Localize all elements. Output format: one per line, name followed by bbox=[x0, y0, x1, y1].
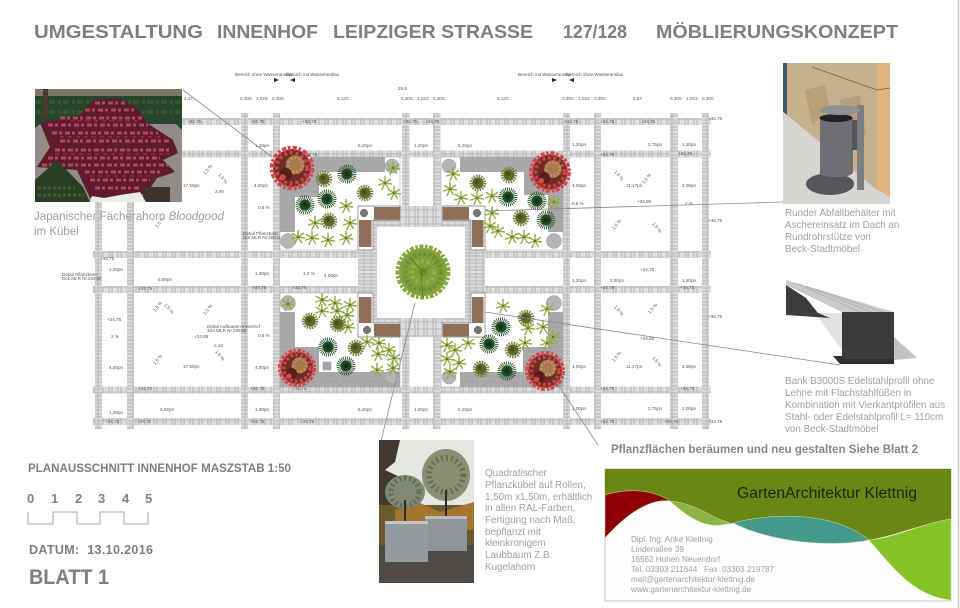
plan annotations: levels and dimensions: 1,5 % bbox=[651, 355, 663, 368]
callout: planting beds note: Pflanzflächen beräumen und neu gestalten Siehe Blatt 2 bbox=[611, 444, 918, 456]
bin post and lid bbox=[857, 105, 864, 190]
plan annotations: levels and dimensions: +34,75 bbox=[252, 285, 267, 290]
plan annotations: levels and dimensions: +34,75 bbox=[708, 218, 723, 223]
plan annotations: levels and dimensions: 4,00pn bbox=[255, 365, 269, 370]
caption: bench: Kombination mit Vierkantprofilen aus bbox=[785, 400, 945, 411]
caption: litter bin: Aschereinsatz im Dach an bbox=[785, 220, 899, 231]
photo: square planters bbox=[379, 440, 474, 583]
scale bar bbox=[27, 491, 152, 524]
plan annotations: levels and dimensions: 1,5 % bbox=[641, 172, 652, 185]
plan annotations: levels and dimensions: +34,75 bbox=[708, 116, 723, 121]
caption: square planters: Quadratischer bbox=[485, 468, 548, 479]
plan paving grid bbox=[93, 113, 711, 429]
plan annotations: levels and dimensions: +34,75 bbox=[600, 119, 615, 124]
plan annotations: levels and dimensions: +34,75 bbox=[600, 419, 615, 424]
plan annotations: levels and dimensions: +34,75 bbox=[664, 419, 679, 424]
planter boxes bbox=[425, 517, 467, 551]
plan annotations: levels and dimensions: 17,50pn bbox=[183, 364, 200, 369]
plan annotations: levels and dimensions: 17,50pn bbox=[183, 183, 200, 188]
litter bins bbox=[360, 209, 482, 334]
plan annotations: levels and dimensions: 2,40 bbox=[215, 189, 224, 194]
contact details: Dipl. Ing. Anke Klettnig bbox=[631, 535, 713, 544]
plan annotations: levels and dimensions: 2 % bbox=[111, 334, 119, 339]
scale bar: 3 bbox=[98, 491, 105, 506]
plants: bottom right bed bbox=[440, 300, 560, 378]
plan annotations: levels and dimensions: 4,00pn bbox=[572, 183, 586, 188]
plan annotations: levels and dimensions: Detail Pflanzbeet bbox=[243, 231, 278, 236]
site plan bbox=[62, 72, 723, 429]
caption: square planters: Kugelahorn bbox=[485, 562, 535, 573]
plan annotations: levels and dimensions: +34,88 bbox=[194, 334, 209, 339]
plan annotations: levels and dimensions: 10A MLR Nr.2061B bbox=[207, 328, 246, 333]
caption: square planters: Fertigung nach Maß, bbox=[485, 515, 576, 526]
plan annotations: levels and dimensions: 11,17pn bbox=[626, 364, 643, 369]
plan annotations: levels and dimensions: 0,300 bbox=[401, 96, 413, 101]
plan annotations: levels and dimensions: 4,00pn bbox=[109, 365, 123, 370]
plan annotations: levels and dimensions: 1,023 bbox=[578, 96, 590, 101]
contact details bbox=[630, 535, 775, 594]
plan annotations: levels and dimensions: 1,00pn bbox=[414, 407, 428, 412]
plan annotations: levels and dimensions: 1,20pn bbox=[414, 143, 428, 148]
plants: top left bed bbox=[292, 162, 400, 246]
plan annotations: levels and dimensions: 4,00pn bbox=[682, 364, 696, 369]
plan annotations: levels and dimensions: +34,75 bbox=[640, 267, 655, 272]
caption: square planters: bepflanzt mit bbox=[485, 527, 541, 538]
caption: square planters: 1,50m x1,50m, erhältlich bbox=[485, 492, 592, 503]
plan annotations: levels and dimensions: 3,57 bbox=[633, 96, 642, 101]
plan annotations: levels and dimensions: 4,00pn bbox=[254, 183, 268, 188]
plants: top right bed bbox=[444, 168, 560, 248]
plan annotations: levels and dimensions: 0,8 % bbox=[258, 333, 270, 338]
plants: bottom left bed bbox=[282, 294, 400, 376]
planting beds: white ground with grey gravel strips bbox=[280, 157, 563, 387]
plan annotations: levels and dimensions: 0,300 bbox=[670, 96, 682, 101]
plan annotations: levels and dimensions: 1,5 % bbox=[611, 350, 622, 363]
caption: Japanese maple: im Kübel bbox=[34, 226, 79, 238]
plan annotations: levels and dimensions: 5,50pn bbox=[158, 277, 172, 282]
caption: bench: Stahl- oder Edelstahlprofil L= 110cm bbox=[785, 412, 943, 423]
scale bar: 0 bbox=[27, 491, 34, 506]
plan annotations: levels and dimensions: 1,023 bbox=[686, 96, 698, 101]
plan annotations: levels and dimensions: 1,5 % bbox=[651, 221, 663, 234]
plan annotations: levels and dimensions: +34,75 bbox=[680, 386, 695, 391]
plan annotations: levels and dimensions: +34,75 bbox=[292, 386, 307, 391]
scale heading: PLANAUSSCHNITT INNENHOF MASZSTAB 1:50 bbox=[28, 463, 291, 475]
plan annotations: levels and dimensions: 5,20pn bbox=[358, 143, 372, 148]
bright green wave bbox=[869, 519, 951, 600]
plan annotations: levels and dimensions: 1,20pn bbox=[682, 142, 696, 147]
contact details: mail@gartenarchitektur-klettnig.de bbox=[631, 575, 755, 584]
caption: bench: von Beck-Stadtmöbel bbox=[785, 424, 879, 435]
plan annotations: levels and dimensions: +34,75 bbox=[303, 152, 318, 157]
plan annotations: levels and dimensions: +34,75 bbox=[600, 386, 615, 391]
plan annotations: levels and dimensions: +34,75 bbox=[100, 256, 115, 261]
bin body bbox=[820, 118, 853, 173]
plan annotations: levels and dimensions: +34,75 bbox=[680, 285, 695, 290]
leader lines bbox=[183, 90, 840, 445]
photo: litter bin bbox=[783, 63, 890, 204]
plan annotations: levels and dimensions: +34,75 bbox=[137, 119, 152, 124]
plan annotations: levels and dimensions: 0,300 bbox=[562, 96, 574, 101]
plan annotations: levels and dimensions: 5,20pn bbox=[358, 407, 372, 412]
title bbox=[34, 22, 898, 42]
plan annotations: levels and dimensions: 5,120 bbox=[497, 96, 509, 101]
olive banner bbox=[605, 469, 951, 543]
caption: square planters: Laubbaum Z.B. bbox=[485, 550, 552, 561]
plan annotations: levels and dimensions: 1,5 % bbox=[214, 349, 226, 362]
plan annotations: levels and dimensions: 1,5 % bbox=[154, 216, 165, 229]
plan annotations: levels and dimensions: Bereich ohne Wasseranslau bbox=[235, 72, 293, 77]
title: 127/128 bbox=[563, 22, 627, 42]
plan annotations: levels and dimensions: +34,75 bbox=[105, 119, 120, 124]
plan annotations: levels and dimensions: Bereich mit Wasseranslau bbox=[518, 72, 572, 77]
plan annotations: levels and dimensions: +34,75 bbox=[292, 285, 307, 290]
plan annotations: levels and dimensions: +34,75 bbox=[302, 119, 317, 124]
central plaza bbox=[358, 206, 485, 337]
caption: Japanese maple: Japanischer Fächerahorn Bloodgood bbox=[34, 211, 225, 223]
plan annotations: levels and dimensions: +34,75 bbox=[250, 386, 265, 391]
caption: bench bbox=[785, 376, 945, 435]
plan annotations: levels and dimensions: 5,20pn bbox=[458, 143, 472, 148]
teal wave bbox=[733, 516, 869, 543]
plan annotations: levels and dimensions: 0,8 % bbox=[258, 205, 270, 210]
plan annotations: levels and dimensions: Dck MLR Nr.2051B bbox=[62, 276, 101, 281]
red wave bbox=[605, 491, 670, 538]
caption: litter bin: Runder Abfallbehälter mit bbox=[785, 208, 896, 219]
plan annotations: levels and dimensions: 0,8 % bbox=[572, 201, 584, 206]
plan annotations: levels and dimensions: 11,17pn bbox=[626, 183, 643, 188]
plan annotations: levels and dimensions: 1,5 % bbox=[202, 303, 213, 316]
plan annotations: levels and dimensions: 4,00pn bbox=[682, 183, 696, 188]
plan annotations: levels and dimensions: 1,3 % bbox=[303, 271, 315, 276]
plan annotations: levels and dimensions: +34,75 bbox=[708, 314, 723, 319]
plan annotations: levels and dimensions: 0,300 bbox=[240, 96, 252, 101]
plan annotations: levels and dimensions: 1,5 % bbox=[613, 304, 625, 317]
plan annotations: levels and dimensions: +34,75 bbox=[403, 119, 418, 124]
plan annotations: levels and dimensions: +34,88 bbox=[637, 199, 652, 204]
plan annotations: levels and dimensions: 0,300 bbox=[433, 96, 445, 101]
planters with grey circles bbox=[280, 159, 562, 384]
plan annotations: levels and dimensions: +34,75 bbox=[641, 119, 656, 124]
title: MÖBLIERUNGSKONZEPT bbox=[656, 22, 898, 42]
plan annotations: levels and dimensions: 1,5 % bbox=[613, 169, 625, 182]
plan annotations: levels and dimensions: 1,5 % bbox=[152, 353, 163, 366]
scale bar: 4 bbox=[122, 491, 130, 506]
plan annotations: levels and dimensions: +34,75 bbox=[564, 119, 579, 124]
caption: bench: Lehne mit Flachstahlfüßen in bbox=[785, 388, 911, 399]
contact details: Tel. 03303 211644 Fax 03303 219787 bbox=[631, 565, 775, 574]
plan annotations: levels and dimensions: Bereich ohne Wasseranslau bbox=[566, 72, 624, 77]
plan annotations: levels and dimensions: 1,5 % bbox=[202, 163, 213, 176]
plan annotations: levels and dimensions: 1,5 % bbox=[647, 302, 658, 315]
plan annotations: levels and dimensions: +34.75 bbox=[187, 119, 202, 124]
scale bar: 1 bbox=[51, 491, 58, 506]
caption: square planters: kleinkronigem bbox=[485, 538, 546, 549]
sheet number: BLATT 1 bbox=[29, 565, 109, 589]
plan annotations: levels and dimensions: 1,00pn bbox=[255, 407, 269, 412]
plan annotations: levels and dimensions: 0,300 bbox=[272, 96, 284, 101]
caption: Japanese maple bbox=[34, 211, 225, 238]
plan annotations: levels and dimensions: Detail Aufbauten Innenhof bbox=[207, 324, 261, 329]
plan annotations: levels and dimensions: 2,75pn bbox=[648, 142, 662, 147]
plan annotations: levels and dimensions: 1,5 % bbox=[152, 300, 163, 313]
title: UMGESTALTUNG bbox=[34, 22, 203, 42]
plan annotations: levels and dimensions: 5,120 bbox=[337, 96, 349, 101]
caption: litter bin: Beck-Stadtmöbel bbox=[785, 244, 860, 255]
plan annotations: levels and dimensions: Detail Pflanzbeet bbox=[62, 272, 97, 277]
plan annotations: levels and dimensions: 1,023 bbox=[256, 96, 268, 101]
plan annotations: levels and dimensions: 5,20pn bbox=[458, 407, 472, 412]
plan annotations: levels and dimensions: 1,00pn bbox=[682, 406, 696, 411]
contact details: Lindenallee 39 bbox=[631, 545, 684, 554]
plan annotations: levels and dimensions: 1,5 % bbox=[217, 172, 229, 185]
company name: GartenArchitektur Klettnig bbox=[737, 485, 917, 502]
plan annotations: levels and dimensions: +34,75 bbox=[250, 419, 265, 424]
plan annotations: levels and dimensions bbox=[62, 72, 723, 424]
plan annotations: levels and dimensions: +34,75 bbox=[250, 119, 265, 124]
plan annotations: levels and dimensions: 4,00pn bbox=[324, 273, 338, 278]
plan annotations: levels and dimensions: +34,75 bbox=[678, 151, 693, 156]
plan annotations: levels and dimensions: 2,75pn bbox=[648, 406, 662, 411]
plan annotations: levels and dimensions: +34,75 bbox=[600, 285, 615, 290]
caption: litter bin: Rundrohrstütze von bbox=[785, 232, 871, 243]
plan annotations: levels and dimensions: 4,00pn bbox=[572, 364, 586, 369]
caption: square planters: in allen RAL-Farben, bbox=[485, 503, 575, 514]
plan annotations: levels and dimensions: +34,75 bbox=[600, 152, 615, 157]
red Japanese maples bbox=[272, 148, 569, 389]
title: INNENHOF bbox=[217, 22, 318, 42]
plan annotations: levels and dimensions: 0,300 bbox=[594, 96, 606, 101]
plan annotations: levels and dimensions: +34,80 bbox=[640, 336, 655, 341]
plan annotations: levels and dimensions: 1,00pn bbox=[109, 410, 123, 415]
plan annotations: levels and dimensions: 0,300 bbox=[702, 96, 714, 101]
plan annotations: levels and dimensions: +34,75 bbox=[425, 119, 440, 124]
plan annotations: levels and dimensions: 3,50pn bbox=[610, 278, 624, 283]
plan annotations: levels and dimensions: 4,02pn bbox=[160, 407, 174, 412]
caption: square planters: Pflanzkübel auf Rollen, bbox=[485, 480, 586, 491]
plan annotations: levels and dimensions: +34,75 bbox=[137, 419, 152, 424]
central tree bbox=[398, 247, 448, 298]
plan annotations: levels and dimensions: 1,20pn bbox=[572, 142, 586, 147]
photo: bench bbox=[786, 280, 917, 364]
benches bbox=[359, 207, 484, 336]
light green wave bbox=[670, 501, 730, 525]
plan annotations: levels and dimensions: Nm MLR Nr.2061B bbox=[243, 235, 282, 240]
plan annotations: levels and dimensions: +34,75 bbox=[105, 419, 120, 424]
title: LEIPZIGER STRASSE bbox=[333, 22, 533, 42]
caption: square planters bbox=[485, 468, 592, 573]
plan annotations: levels and dimensions: +34,75 bbox=[300, 419, 315, 424]
plan annotations: levels and dimensions: 1,20pn bbox=[255, 143, 269, 148]
logo card bbox=[605, 469, 951, 601]
plan annotations: levels and dimensions: 2,44 bbox=[214, 343, 223, 348]
corner boxes bbox=[358, 206, 485, 337]
plan annotations: levels and dimensions: 1,5 % bbox=[611, 218, 622, 231]
plan annotations: levels and dimensions: Bereich mit Wasseranslau bbox=[286, 72, 340, 77]
plan annotations: levels and dimensions: 1,023 bbox=[417, 96, 429, 101]
plan annotations: levels and dimensions: +34,75 bbox=[708, 419, 723, 424]
caption: bench: Bank B3000S Edelstahlprofil ohne bbox=[785, 376, 935, 387]
plan annotations: levels and dimensions: 1,5 % bbox=[163, 302, 175, 315]
contact details: www.gartenarchitektur-klettnig.de bbox=[630, 585, 752, 594]
plaza white centre bbox=[377, 227, 465, 318]
plan annotations: levels and dimensions: 4,37 bbox=[184, 96, 193, 101]
plan annotations: levels and dimensions: 1,20pn bbox=[682, 278, 696, 283]
scale bar: 5 bbox=[145, 491, 152, 506]
date: DATUM: 13.10.2016 bbox=[29, 543, 153, 557]
plan annotations: levels and dimensions: 1,20pn bbox=[109, 267, 123, 272]
plan annotations: levels and dimensions: +34,75 bbox=[138, 286, 153, 291]
caption: litter bin bbox=[785, 208, 899, 255]
photo: Japanese maple bbox=[35, 89, 182, 202]
plan annotations: levels and dimensions: 1,20pn bbox=[572, 278, 586, 283]
plan annotations: levels and dimensions: +34,75 bbox=[107, 317, 122, 322]
scale bar: 2 bbox=[75, 491, 82, 506]
plan annotations: levels and dimensions: 2 % bbox=[685, 201, 693, 206]
plan annotations: levels and dimensions: +34,75 bbox=[138, 386, 153, 391]
plan annotations: levels and dimensions: 1,20pn bbox=[255, 271, 269, 276]
plan annotations: levels and dimensions: 25,8 bbox=[398, 86, 407, 91]
plan annotations: levels and dimensions: 1,00pn bbox=[572, 406, 586, 411]
contact details: 16562 Hohen Neuendorf bbox=[631, 555, 721, 564]
